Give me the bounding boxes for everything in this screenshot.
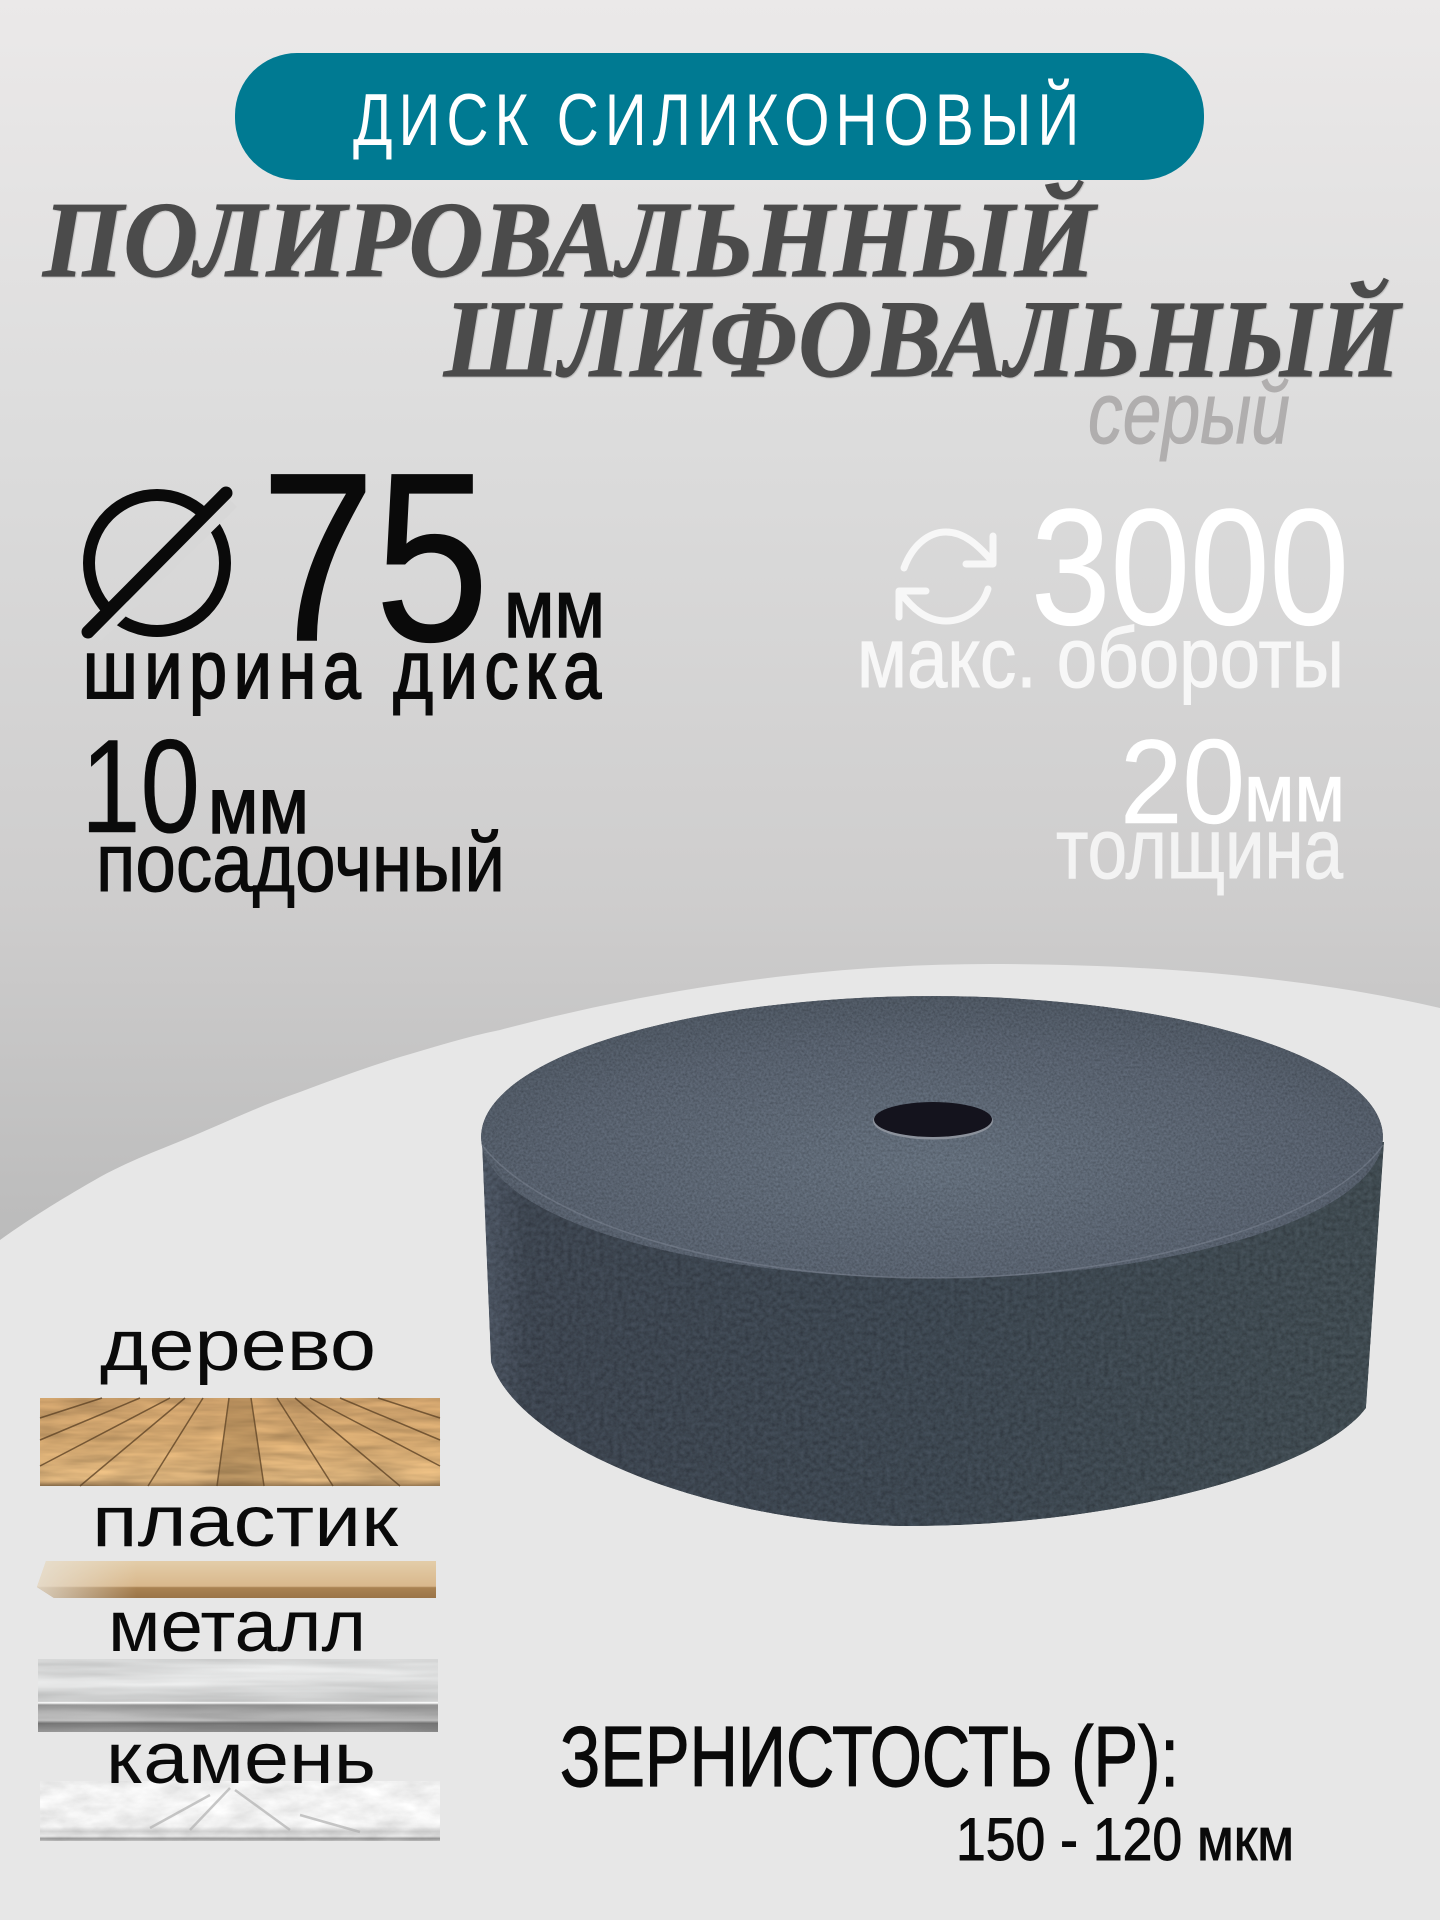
spec: arbor 10 mm — [81, 713, 505, 909]
grit value: 150 - 120 мкм — [956, 1806, 1294, 1873]
light lower panel with curved top — [0, 964, 1440, 1920]
material: plastic — [37, 1482, 436, 1598]
product: silicone disc — [481, 996, 1384, 1526]
spec: disc diameter 75 mm: ширина диска — [83, 624, 602, 717]
subheading: colour: серый — [1088, 365, 1290, 462]
disc side — [482, 1142, 1384, 1526]
disc centre hole — [873, 1102, 993, 1140]
material: wood — [40, 1306, 440, 1486]
material: stone: камень — [106, 1719, 376, 1799]
material: stone — [40, 1719, 440, 1841]
spec: max rpm 3000: 3000 — [1031, 475, 1349, 659]
icon: rotation arrows — [899, 532, 993, 621]
icon: diameter symbol — [88, 493, 232, 636]
spec: max rpm 3000 — [857, 475, 1349, 706]
spec: disc diameter 75 mm — [83, 423, 605, 717]
title pill — [235, 53, 1204, 180]
disc top rim highlight — [482, 1145, 1383, 1278]
spec: thickness 20 mm: 20 — [1120, 715, 1245, 849]
material: plastic: пластик — [92, 1482, 399, 1562]
heading: grinding: ШЛИФОВАЛЬНЫЙ — [443, 277, 1403, 400]
heading: polishing: ПОЛИРОВАЛЬННЫЙ — [42, 180, 1098, 300]
spec: arbor 10 mm: посадочный — [96, 816, 505, 909]
spec: thickness 20 mm: толщина — [1056, 802, 1344, 897]
spec: disc diameter 75 mm: 75 — [261, 423, 489, 691]
materials list — [37, 1306, 440, 1841]
spec: thickness 20 mm — [1056, 715, 1345, 897]
spec: arbor 10 mm: 10 — [81, 713, 200, 861]
material: metal — [38, 1587, 438, 1732]
spec: arbor 10 mm: мм — [208, 761, 309, 850]
grit heading: ЗЕРНИСТОСТЬ (Р): — [560, 1710, 1179, 1805]
material: metal: металл — [108, 1587, 366, 1667]
title pill: ДИСК СИЛИКОНОВЫЙ — [353, 78, 1079, 162]
spec: disc diameter 75 mm: мм — [504, 562, 605, 655]
spec: thickness 20 mm: мм — [1244, 746, 1345, 839]
disc top face — [481, 996, 1383, 1278]
spec: max rpm 3000: макс. обороты — [857, 611, 1344, 706]
material: wood: дерево — [100, 1306, 376, 1386]
